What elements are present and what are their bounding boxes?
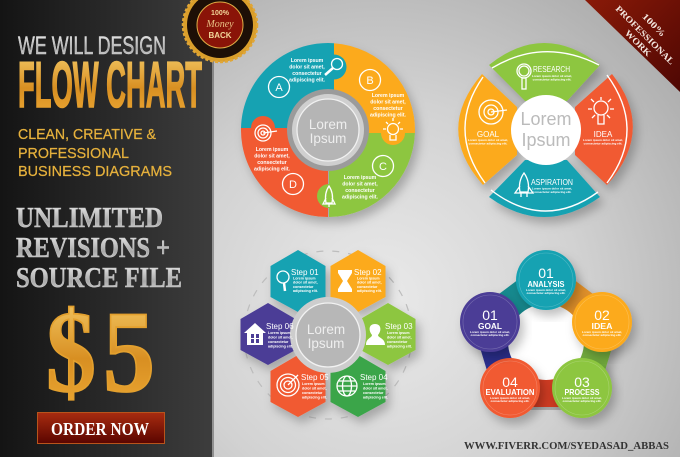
segment C: consectetur (345, 188, 375, 194)
step 01: adipiscing elit. (293, 289, 318, 293)
segment A: adipiscing elit. (289, 78, 326, 84)
circle: analysis: ANALYSIS (528, 279, 565, 289)
step 04 (337, 373, 388, 400)
segment C (342, 156, 394, 200)
segment D: consectetur (257, 160, 287, 166)
diagram: four petals (458, 43, 633, 217)
segment D: D (289, 179, 297, 191)
icon: rocket (323, 186, 335, 207)
step 06 (244, 322, 294, 348)
petals (458, 43, 633, 217)
circle: process: Lorem ipsum dolor sit amet, (562, 396, 602, 400)
circle: goal: consectetur adipiscing elit. (471, 333, 509, 337)
corner ribbon (585, 0, 680, 92)
petal: idea: Lorem ipsum dolor sit amet, (583, 138, 623, 142)
circle: evaluation: consectetur adipiscing elit. (491, 399, 529, 403)
center white shape (508, 304, 584, 380)
step 03: Lorem ipsum (387, 331, 410, 335)
diagram: five circles (460, 250, 632, 418)
step 02: Step 02 (354, 268, 382, 277)
order now button (38, 412, 164, 444)
segment B: consectetur (373, 106, 403, 112)
step 02 (338, 268, 382, 293)
petal: aspiration: Lorem ipsum dolor sit amet, (532, 186, 572, 190)
icon: magnifier (325, 58, 342, 75)
step 06: dolor sit amet, (268, 336, 293, 340)
petal: aspiration (515, 173, 573, 197)
segment D: dolor sit amet, (254, 154, 290, 160)
circle: analysis: consectetur adipiscing elit. (527, 291, 565, 295)
circle: evaluation: EVALUATION (486, 387, 534, 397)
step 01: dolor sit amet, (293, 280, 318, 284)
step 06: consectetur (268, 340, 289, 344)
center circle (511, 95, 581, 165)
center hub: Lorem (309, 117, 347, 132)
text: FLOW CHART (18, 48, 202, 121)
center hub: Ipsum (308, 336, 344, 351)
subtitle (18, 126, 172, 180)
step 03: consectetur (387, 340, 408, 344)
step 04: adipiscing elit. (363, 396, 388, 400)
petal inner lines (465, 52, 627, 211)
step 02: adipiscing elit. (357, 289, 382, 293)
corner ribbon: 100% (640, 11, 668, 39)
money back badge: BACK (208, 31, 232, 40)
center hub: Lorem (307, 322, 345, 337)
step 05: dolor sit amet, (302, 386, 327, 390)
segment B: B (366, 75, 374, 87)
circle: idea: 02 (594, 307, 610, 323)
step 03 (366, 322, 413, 348)
icon: target (255, 125, 277, 141)
petal: idea (583, 97, 623, 146)
step 01: Step 01 (291, 268, 319, 277)
petal: research: RESEARCH (533, 65, 570, 74)
money back badge (183, 0, 257, 62)
segment C: Lorem ipsum (344, 175, 377, 181)
petal: idea: consectetur adipiscing elit. (584, 142, 622, 146)
segment C: adipiscing elit. (342, 194, 379, 200)
circle: idea (572, 292, 632, 352)
website url: WWW.FIVERR.COM/SYEDASAD_ABBAS (464, 440, 669, 452)
unlimited revisions text: SOURCE FILE (16, 262, 182, 294)
circle: analysis (516, 250, 576, 310)
money back badge: Money (205, 19, 234, 30)
step 06: Lorem ipsum (268, 331, 291, 335)
puzzle tabs (251, 54, 405, 208)
petal: idea: IDEA (594, 130, 613, 139)
segment C: C (379, 161, 387, 173)
icon: bulb (383, 118, 403, 140)
step 03: Step 03 (385, 322, 413, 331)
step 02: Lorem ipsum (357, 276, 380, 280)
price: $ (46, 288, 96, 417)
diagram: hexagons (240, 250, 416, 419)
segment A (268, 58, 326, 98)
connector bands (490, 280, 602, 388)
diagram: circular puzzle (241, 43, 415, 217)
center circle: Ipsum (521, 130, 571, 150)
center hub (287, 89, 369, 171)
circle: process: 03 (574, 374, 590, 390)
petal: goal: consectetur adipiscing elit. (469, 142, 507, 146)
step 06: adipiscing elit. (268, 344, 293, 348)
step 04: Step 04 (360, 373, 388, 382)
center hub (290, 297, 366, 373)
corner ribbon: WORK (623, 28, 653, 58)
segment B: dolor sit amet, (370, 100, 406, 106)
money back badge: 100% (211, 10, 230, 17)
circle: idea: IDEA (592, 321, 612, 331)
petal: research (517, 64, 572, 89)
step 01 (277, 268, 319, 293)
petal: goal: GOAL (477, 130, 500, 139)
subtitle: BUSINESS DIAGRAMS (18, 163, 172, 180)
center hub: Ipsum (310, 131, 346, 146)
segment B (360, 70, 407, 118)
circle: goal (460, 292, 520, 352)
circle: process: consectetur adipiscing elit. (563, 399, 601, 403)
petal: aspiration: ASPIRATION (531, 178, 573, 187)
segment B: adipiscing elit. (370, 112, 407, 118)
circle: process (552, 358, 612, 418)
step 06: Step 06 (266, 322, 294, 331)
circle: goal: 01 (482, 307, 498, 323)
circle: evaluation: Lorem ipsum dolor sit amet, (490, 396, 530, 400)
petal: aspiration: consectetur adipiscing elit. (533, 190, 571, 194)
circle: analysis: Lorem ipsum dolor sit amet, (526, 288, 566, 292)
segment A: A (275, 82, 283, 94)
circle: idea: Lorem ipsum dolor sit amet, (582, 330, 622, 334)
left panel (0, 0, 214, 457)
circle: goal: Lorem ipsum dolor sit amet, (470, 330, 510, 334)
step 02: dolor sit amet, (357, 280, 382, 284)
circle: analysis: 01 (538, 265, 554, 281)
petal: research: Lorem ipsum dolor sit amet, (532, 74, 572, 78)
segment A: consectetur (292, 71, 322, 77)
step 05: Step 05 (301, 373, 329, 382)
step 04: Lorem ipsum (363, 382, 386, 386)
segment D: adipiscing elit. (254, 166, 291, 172)
circle: evaluation (480, 358, 540, 418)
heading: we will design: WE WILL DESIGN (18, 32, 166, 60)
segment C: dolor sit amet, (342, 182, 378, 188)
segment A: Lorem ipsum (291, 58, 324, 64)
step 04: consectetur (363, 391, 384, 395)
hex shapes (240, 250, 416, 417)
step 05: consectetur (302, 391, 323, 395)
step 05: adipiscing elit. (302, 396, 327, 400)
corner ribbon: PROFESSIONAL (614, 4, 676, 66)
step 01: Lorem ipsum (293, 276, 316, 280)
subtitle: CLEAN, CREATIVE & (18, 126, 156, 143)
step 03: adipiscing elit. (387, 344, 412, 348)
segment D: Lorem ipsum (256, 147, 289, 153)
step 04: dolor sit amet, (363, 386, 388, 390)
order now button: ORDER NOW (51, 419, 149, 439)
step 05 (277, 373, 329, 400)
segment A: dolor sit amet, (289, 64, 325, 70)
segment D (254, 147, 304, 194)
unlimited revisions text (16, 202, 182, 294)
price: 5 (103, 288, 155, 417)
step 05: Lorem ipsum (302, 382, 325, 386)
circle: idea: consectetur adipiscing elit. (583, 333, 621, 337)
subtitle: PROFESSIONAL (18, 145, 129, 162)
dashed ring (244, 251, 412, 419)
step 01: consectetur (293, 285, 314, 289)
unlimited revisions text: REVISIONS + (16, 232, 170, 264)
circle: goal: GOAL (478, 321, 502, 331)
step 02: consectetur (357, 285, 378, 289)
step 03: dolor sit amet, (387, 336, 412, 340)
unlimited revisions text: UNLIMITED (16, 202, 163, 234)
circle: process: PROCESS (564, 387, 600, 397)
petal: goal: Lorem ipsum dolor sit amet, (468, 138, 508, 142)
center circle: Lorem (520, 109, 572, 129)
price (46, 288, 155, 417)
circle: evaluation: 04 (502, 374, 518, 390)
petal: goal (468, 100, 508, 146)
petal: research: consectetur adipiscing elit. (533, 78, 571, 82)
ring segments (241, 43, 415, 217)
segment B: Lorem ipsum (372, 93, 405, 99)
